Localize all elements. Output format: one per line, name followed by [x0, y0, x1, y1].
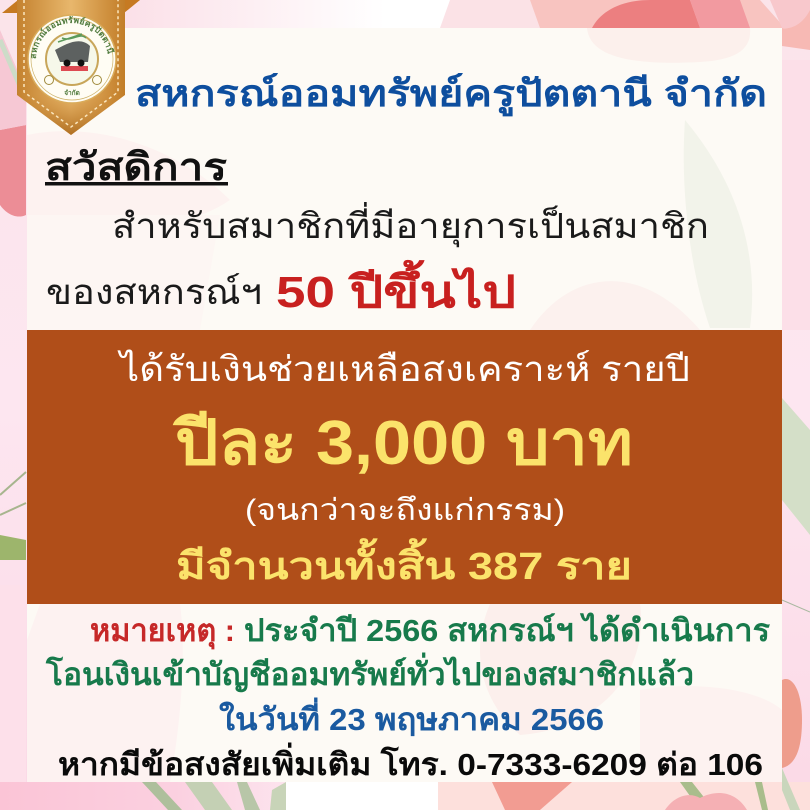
eligibility line 2	[46, 259, 516, 317]
note	[45, 612, 770, 737]
contact line: หากมีข้อสงสัยเพิ่มเติม โทร. 0-7333-6209 ต่อ 106	[58, 742, 763, 782]
logo seal	[28, 15, 116, 103]
ribbon badge with logo	[2, 0, 140, 135]
ribbon badge with logo: สหกรณ์ออมทรัพย์ครูปัตตานี	[31, 16, 115, 58]
ribbon badge with logo: จำกัด	[64, 89, 80, 97]
eligibility line 2: ของสหกรณ์ฯ	[46, 273, 262, 312]
eligibility line 2: 50 ปีขึ้นไป	[276, 259, 516, 317]
heading: welfare: สวัสดิการ	[45, 147, 228, 189]
benefit heading: ได้รับเงินช่วยเหลือสงเคราะห์ รายปี	[117, 349, 690, 389]
benefit amount: ปีละ 3,000 บาท	[172, 409, 633, 478]
note: ประจำปี 2566 สหกรณ์ฯ ได้ดำเนินการ	[244, 612, 770, 648]
member count: มีจำนวนทั้งสิ้น 387 ราย	[176, 538, 632, 588]
eligibility line 1: สำหรับสมาชิกที่มีอายุการเป็นสมาชิก	[112, 202, 709, 247]
ribbon flaps	[2, 0, 140, 13]
note: หมายเหตุ :	[90, 613, 235, 650]
title: สหกรณ์ออมทรัพย์ครูปัตตานี จำกัด	[135, 73, 767, 117]
note: โอนเงินเข้าบัญชีออมทรัพย์ทั่วไปของสมาชิกแล้ว	[45, 652, 694, 693]
panel: benefit band	[27, 330, 782, 604]
ribbon body	[17, 0, 125, 135]
note: ในวันที่ 23 พฤษภาคม 2566	[219, 697, 604, 737]
benefit duration: (จนกว่าจะถึงแก่กรรม)	[245, 494, 565, 527]
